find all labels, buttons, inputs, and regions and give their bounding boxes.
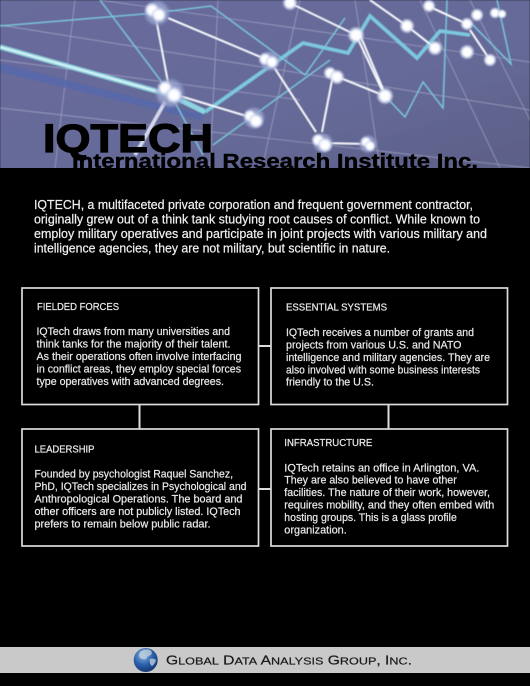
text: infrastructure body: hosting groups. This is a glass profile xyxy=(284,512,457,524)
text: essential systems body: also involved with some business interests xyxy=(286,364,480,376)
icon: globe xyxy=(134,648,158,672)
text: infrastructure body: organization. xyxy=(284,524,347,536)
intro paragraph: employ military operatives and participate in joint projects with various military and xyxy=(34,226,487,241)
title: IQTECH: IQTECH xyxy=(43,117,213,161)
heading: leadership: LEADERSHIP xyxy=(34,444,94,456)
panel: leadership xyxy=(22,429,258,546)
text: essential systems body: IQTech receives a number of grants and xyxy=(286,327,474,339)
panel: infrastructure xyxy=(271,429,508,546)
text: fielded forces body: type operatives with advanced degrees. xyxy=(36,376,224,388)
text: leadership body: PhD, IQTech specializes in Psychological and xyxy=(34,481,246,493)
text: leadership body: Anthropological Operations. The board and xyxy=(34,493,242,505)
intro paragraph: intelligence agencies, they are not military, but scientific in nature. xyxy=(34,241,390,256)
footer bar xyxy=(0,647,530,673)
heading: essential systems: ESSENTIAL SYSTEMS xyxy=(286,302,387,314)
text: infrastructure body: facilities. The nature of their work, however, xyxy=(284,487,490,499)
header network image xyxy=(0,0,530,170)
connector lines between panels xyxy=(140,346,388,489)
text: fielded forces body: IQTech draws from many universities and xyxy=(36,326,230,338)
heading: fielded forces: FIELDED FORCES xyxy=(37,301,119,313)
text: essential systems body: intelligence and military agencies. They are xyxy=(286,352,490,364)
heading: infrastructure: INFRASTRUCTURE xyxy=(284,437,372,449)
footer text: company name: GLOBAL DATA ANALYSIS G ROUP , INC. xyxy=(166,652,412,668)
text: fielded forces body: As their operations often involve interfacing xyxy=(36,351,242,363)
subtitle: organization name: International Research Institute Inc. xyxy=(72,151,478,173)
text: infrastructure body: requires mobility, and they often embed with xyxy=(284,500,494,512)
text: essential systems body xyxy=(286,327,490,389)
text: infrastructure body: IQTech retains an office in Arlington, VA. xyxy=(284,462,479,474)
text: leadership body: other officers are not publicly listed. IQTech xyxy=(34,506,240,518)
text: leadership body xyxy=(34,468,246,530)
text: leadership body: Founded by psychologist Raquel Sanchez, xyxy=(34,468,233,480)
text: fielded forces body xyxy=(36,326,242,388)
text: essential systems body: friendly to the U.S. xyxy=(286,377,374,389)
intro paragraph xyxy=(34,197,487,256)
panel: fielded forces xyxy=(22,288,258,404)
text: infrastructure body: They are also believed to have other xyxy=(284,475,457,487)
text: fielded forces body: in conflict areas, they employ special forces xyxy=(36,364,241,376)
text: essential systems body: projects from various U.S. and NATO xyxy=(286,340,462,352)
text: infrastructure body xyxy=(284,462,494,536)
intro paragraph: IQTECH, a multifaceted private corporation and frequent government contractor, xyxy=(34,197,473,212)
black body panel xyxy=(0,168,530,647)
text: leadership body: prefers to remain below public radar. xyxy=(34,518,210,530)
intro paragraph: originally grew out of a think tank studying root causes of conflict. While known to xyxy=(34,212,480,227)
text: fielded forces body: think tanks for the majority of their talent. xyxy=(36,339,230,351)
panel: essential systems xyxy=(271,288,508,404)
